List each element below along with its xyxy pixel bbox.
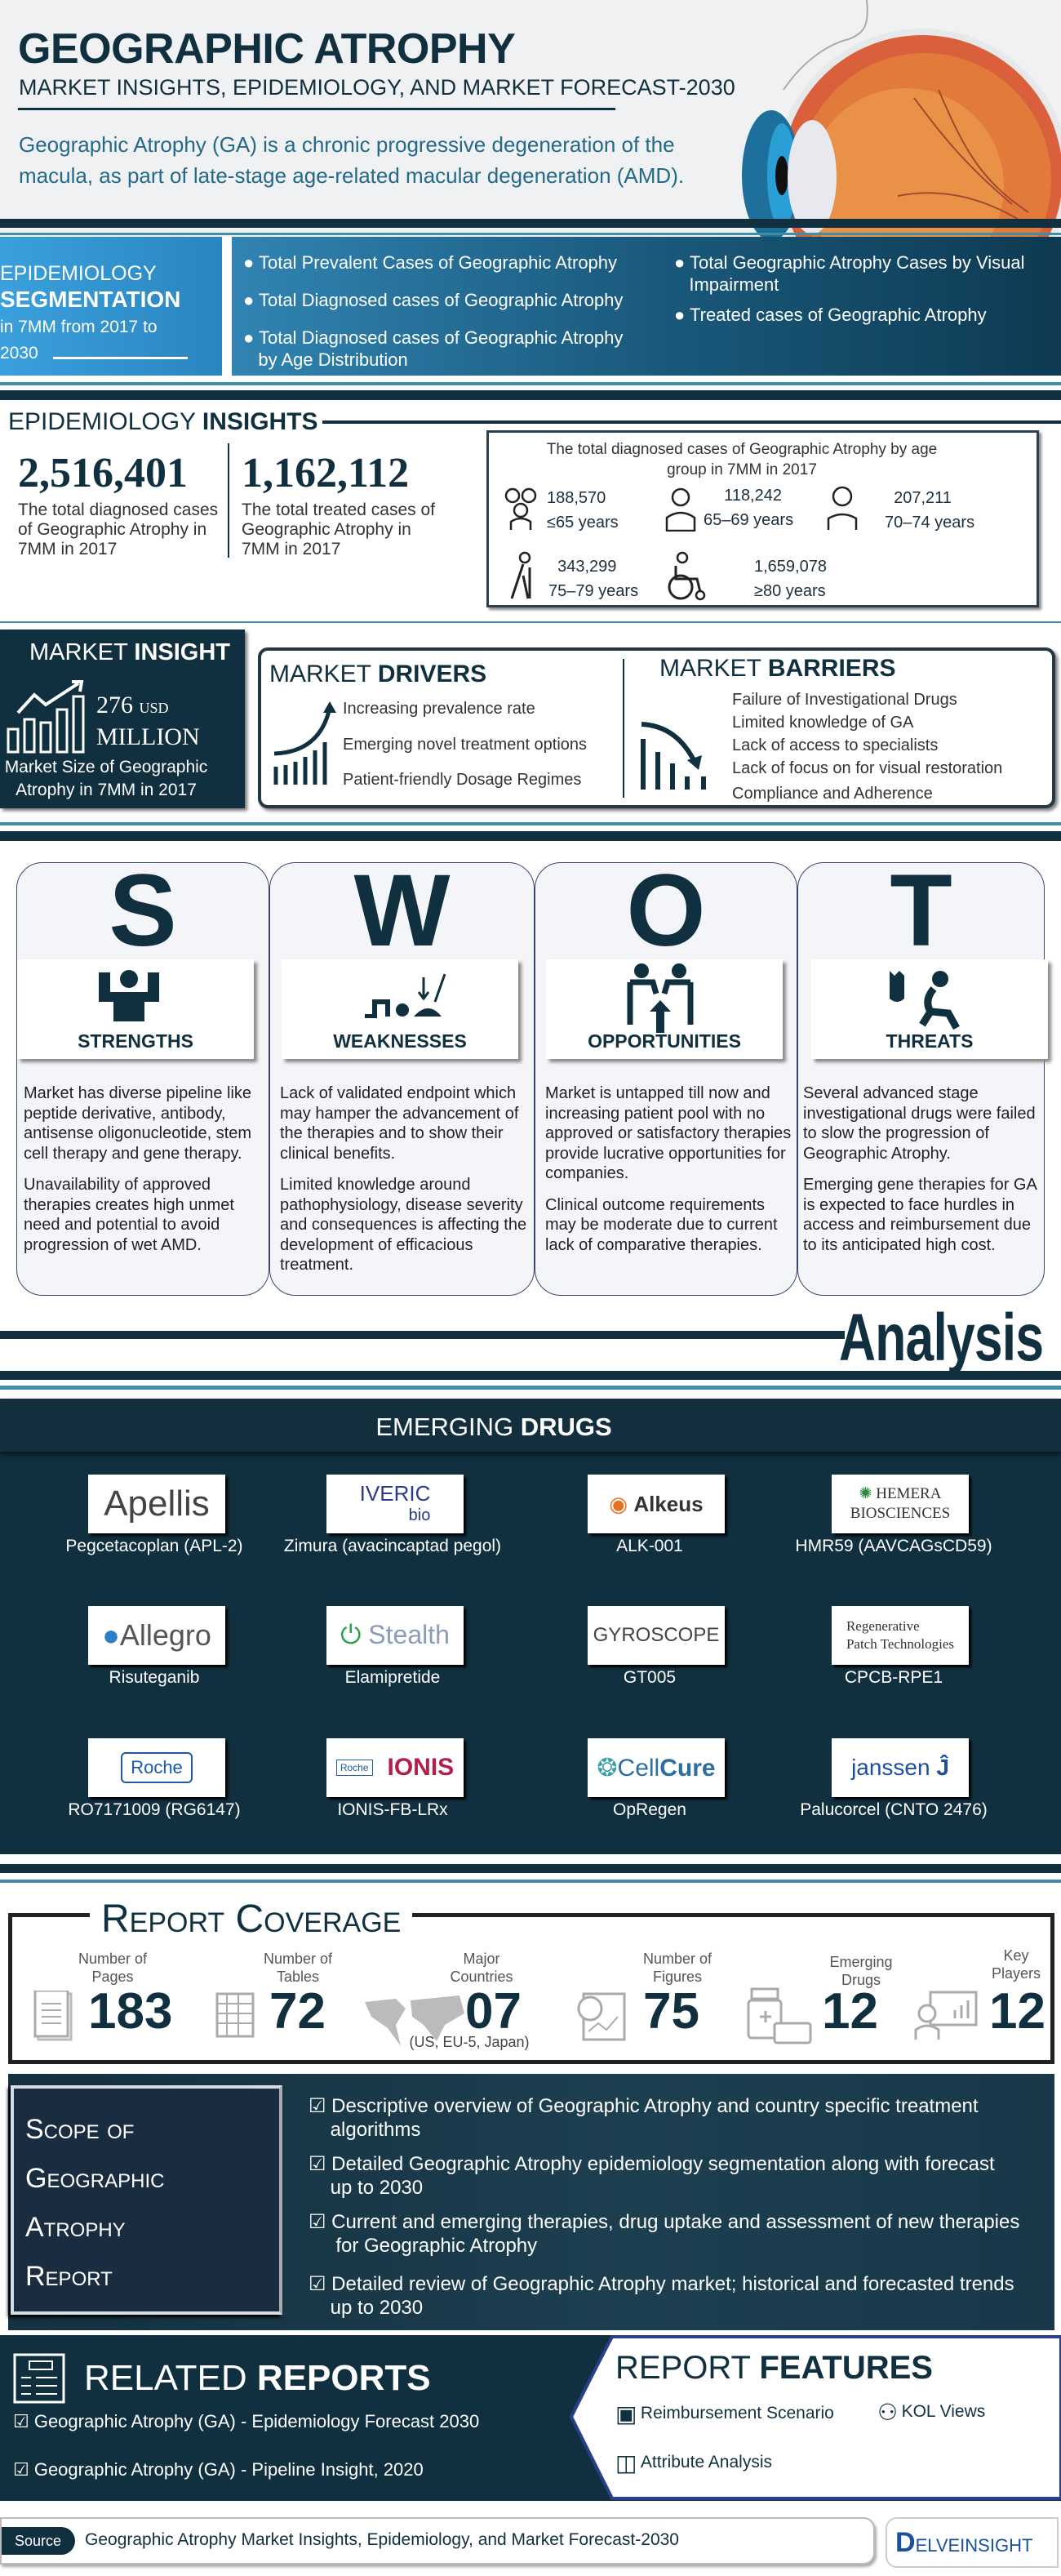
drivers list: Increasing prevalence rate [343,700,535,718]
drug: Apellis: Apellis [104,1484,210,1524]
item: tables [215,1951,333,2040]
panel: report features [570,2335,1061,2500]
scope bullets: up to 2030 [331,2297,423,2319]
scope bullets: for Geographic Atrophy [335,2235,537,2257]
panel: age groups: group in 7MM in 2017 [667,461,817,478]
panel: market insight: Atrophy in 7MM in 2017 [16,781,197,799]
age item ≥80 [668,552,827,601]
item: key players [914,1947,1045,2040]
segmentation heading: in 7MM from 2017 to [0,318,158,336]
panel: SWOT strengths [16,862,269,1296]
drivers list: Emerging novel treatment options [343,736,587,754]
age item 70-74: 70–74 years [885,514,974,532]
item: emerging drugs: Drugs [841,1972,881,1988]
panel: emerging drugs [0,1399,1061,1854]
drug: Regenerative Patch: Patch Technologies [846,1636,954,1652]
age item 65-69: 65–69 years [704,511,793,529]
item: emerging drugs: 12 [822,1983,878,2040]
panel: SWOT opportunities: O [626,854,706,968]
item: pages: Pages [91,1969,134,1985]
panel: drivers and barriers [258,647,1055,808]
panel: market insight: 276 USD [96,692,169,719]
text: RO7171009 (RG6147) [68,1800,241,1819]
item: key players: Players [992,1965,1041,1982]
age item ≤65 [504,488,619,532]
segmentation heading [0,262,180,363]
drug: Hemera [832,1475,969,1533]
drug: Allegro [88,1606,225,1665]
stat: diagnosed cases: The total diagnosed cases [18,501,218,519]
segmentation bullets: by Age Distribution [258,349,408,370]
scope bullets: ☑ Detailed Geographic Atrophy epidemiology segmentation along with forecast [309,2153,995,2175]
text: Pegcetacoplan (APL-2) [65,1537,243,1555]
panel: SWOT opportunities: Market is untapped till now and increasing patient pool with no approved or satisfactory therapies provide lucrative opportunities for companies. [545,1084,791,1182]
drivers heading: MARKET DRIVERS [269,661,486,687]
source bar: Source [15,2533,61,2549]
item: figures: Figures [653,1969,702,1985]
coverage heading: Report Coverage [101,1898,401,1941]
panel: SWOT threats [797,862,1045,1296]
text: Risuteganib [109,1668,199,1687]
text: IONIS-FB-LRx [337,1800,448,1819]
band lines [0,219,1061,228]
panel: SWOT opportunities: OPPORTUNITIES [588,1030,741,1052]
description: Geographic Atrophy (GA) is a chronic progressive degeneration of the macula, as part of late-stage age-related macular degeneration (AMD). [19,132,684,188]
age item 70-74 [828,487,974,532]
segmentation bullets [243,252,624,370]
panel: report coverage [8,1913,1054,2064]
scope bullets: ☑ Descriptive overview of Geographic Atrophy and country specific treatment [309,2095,979,2117]
item: key players: 12 [989,1983,1045,2040]
item: figures: 75 [643,1983,699,2040]
age item 70-74: 207,211 [894,489,952,507]
item: countries: Major [463,1951,499,1967]
icon: report document [13,2353,65,2404]
scope title box: Atrophy [25,2212,126,2243]
related heading: RELATED REPORTS [84,2358,431,2398]
panel: SWOT weaknesses: Limited knowledge around pathophysiology, disease severity and consequences is affecting the development of efficacious treatment. [280,1176,526,1274]
scope title box: Scope of [25,2114,134,2145]
item: figures [578,1951,712,2041]
scope bullets: ☑ Current and emerging therapies, drug uptake and assessment of new therapies [309,2211,1019,2233]
barriers list [732,691,1002,803]
drug: Apellis [88,1475,225,1533]
panel: market insight: Market Size of Geographic [5,758,207,776]
stat: diagnosed cases: 7MM in 2017 [18,540,117,558]
logo: DelveInsight: DELVEINSIGHT [895,2527,1032,2558]
barriers list: Lack of access to specialists [732,736,938,754]
drug: Ionis [326,1738,464,1797]
item: pages: Number of [78,1951,147,1967]
text: Zimura (avacincaptad pegol) [284,1537,501,1555]
panel: age groups: The total diagnosed cases of Geographic Atrophy by age [547,441,937,458]
age item ≥80: ≥80 years [754,582,826,600]
feature: reimbursement: ▣ Reimbursement Scenario [615,2401,834,2427]
related list: ☑ Geographic Atrophy (GA) - Epidemiology Forecast 2030 [13,2411,479,2431]
icon: bomb and person [890,971,960,1030]
item: key players: Key [1003,1947,1029,1964]
item: countries [365,1951,530,2050]
barriers list: Lack of focus on for visual restoration [732,759,1002,777]
text: HMR59 (AAVCAGsCD59) [795,1537,992,1555]
barriers list: Compliance and Adherence [732,785,933,803]
subtitle: MARKET INSIGHTS, EPIDEMIOLOGY, AND MARKET FORECAST-2030 [19,75,735,100]
age item ≥80: 1,659,078 [754,558,827,576]
panel: related reports: ☑ Geographic Atrophy (GA) - Pipeline Insight, 2020 [13,2459,424,2480]
panel: SWOT strengths: Market has diverse pipeline like peptide derivative, antibody, antisense oligonucleotide, stem cell therapy and gene therapy. [24,1084,251,1163]
panel: SWOT opportunities: Clinical outcome requirements may be moderate due to current lack of comparative therapies. [545,1195,778,1254]
drug: CellCure [588,1738,725,1797]
icon: falling chart [641,722,706,790]
drug: Stealth: ⏻ Stealth [340,1620,450,1649]
panel: SWOT opportunities [535,862,797,1296]
drug: Iveric: bio [409,1506,430,1524]
drug: CellCure: ❂CellCure [597,1754,716,1782]
scope bullets: algorithms [331,2119,420,2141]
drivers list [343,700,587,789]
drug: Allegro: ●Allegro [102,1618,211,1652]
panel: epidemiology segmentation: Impairment [689,274,779,295]
stat: diagnosed cases [18,450,218,558]
text: GT005 [624,1668,676,1687]
item: tables: Tables [277,1969,319,1985]
scope bullets: ☑ Detailed review of Geographic Atrophy market; historical and forecasted trends [309,2273,1014,2295]
stat: treated cases: The total treated cases of [242,501,435,519]
panel: age groups [486,430,1039,607]
item: tables: 72 [269,1983,326,2040]
text: OpRegen [613,1800,686,1819]
panel: market insight: MILLION [96,723,200,750]
icon: rising chart [274,701,336,785]
panel: SWOT threats: THREATS [886,1030,973,1052]
drug: Ionis: Roche [340,1762,369,1773]
title: GEOGRAPHIC ATROPHY [18,25,515,73]
drug: Janssen: janssen Ĵ [851,1755,949,1780]
item: countries: Countries [450,1969,513,1985]
panel: scope of report [8,2074,1054,2330]
stat: diagnosed cases: of Geographic Atrophy in [18,520,206,539]
eye illustration [742,0,1061,237]
barriers list: Limited knowledge of GA [732,714,913,732]
panel: SWOT weaknesses [269,862,535,1296]
emerging drugs heading: EMERGING DRUGS [375,1413,612,1441]
segmentation bullets: ● Total Diagnosed cases of Geographic Atrophy [243,327,623,348]
age item 75-79 [511,552,638,600]
feature: KOL views: ⚇ KOL Views [877,2400,985,2425]
panel: epidemiology segmentation: ● Treated cases of Geographic Atrophy [674,305,987,325]
age item ≤65: 188,570 [547,489,606,507]
panel: SWOT threats: T [890,854,952,968]
drug: Regenerative Patch: Regenerative [846,1618,920,1634]
panel: market insight [0,630,245,808]
header background [0,0,1061,237]
drug: Roche: Roche [131,1757,183,1777]
stat: treated cases: 1,162,112 [242,450,409,496]
segmentation heading: 2030 [0,344,38,363]
panel: SWOT weaknesses: WEAKNESSES [333,1030,467,1052]
feature: attribute analysis: ◫ Attribute Analysis [615,2450,772,2476]
heading: epidemiology insights: EPIDEMIOLOGY INSIGHTS [8,408,318,435]
segmentation bullets: ● Total Diagnosed cases of Geographic Atrophy [243,290,623,310]
icon: falling person [365,973,446,1018]
panel: SWOT threats: Several advanced stage investigational drugs were failed to slow the progression of Geographic Atrophy. [803,1084,1036,1163]
segmentation heading: EPIDEMIOLOGY [0,262,157,285]
drug: Gyroscope [588,1606,725,1665]
item: figures: Number of [643,1951,712,1967]
item: pages [34,1951,172,2041]
panel: epidemiology segmentation [0,237,1061,376]
panel: epidemiology segmentation: ● Total Geographic Atrophy Cases by Visual [674,252,1025,273]
stat: diagnosed cases: 2,516,401 [18,450,188,496]
scope bullets [309,2095,1019,2319]
segmentation bullets: ● Total Prevalent Cases of Geographic Atrophy [243,252,617,273]
scope title box: Geographic [25,2163,164,2194]
source bar: Geographic Atrophy Market Insights, Epidemiology, and Market Forecast-2030 [85,2530,679,2549]
drug: Stealth [326,1606,464,1665]
panel: market insight: MARKET INSIGHT [29,639,230,665]
stat: treated cases: Geographic Atrophy in [242,520,411,539]
drug: Regenerative Patch [832,1606,969,1665]
text: Elamipretide [345,1668,440,1687]
icon: strong man [99,970,159,1021]
heading: analysis [0,1331,845,1339]
barriers list: Failure of Investigational Drugs [732,691,957,709]
drug: Alkeus [588,1475,725,1533]
panel: SWOT weaknesses: Lack of validated endpoint which may hamper the advancement of the therapies and to show their clinical benefits. [280,1084,518,1163]
drug: Janssen [832,1738,969,1797]
item: emerging drugs [748,1954,893,2044]
stat: treated cases [242,450,435,558]
icon: two people with arrow [627,963,694,1033]
text: ALK-001 [616,1537,683,1555]
panel: related reports [0,2335,1061,2501]
text: Analysis [839,1301,1043,1375]
age item ≤65: ≤65 years [547,514,619,532]
text: CPCB-RPE1 [845,1668,943,1687]
panel: SWOT weaknesses: W [354,854,450,968]
panel: SWOT strengths: S [109,854,177,968]
drug: Alkeus: ◉ Alkeus [609,1491,704,1515]
drug: Hemera: ✺ HEMERA [859,1485,941,1502]
icon: growth bars [7,680,85,753]
stat: treated cases: 7MM in 2017 [242,540,340,558]
panel: SWOT strengths: STRENGTHS [78,1030,193,1052]
age item 65-69: 118,242 [724,487,782,505]
drug: Roche [88,1738,225,1797]
drug: Iveric: IVERIC [360,1481,430,1506]
item: tables: Number of [264,1951,332,1967]
item: countries: (US, EU-5, Japan) [409,2034,530,2050]
text: Palucorcel (CNTO 2476) [800,1800,988,1819]
segmentation heading: SEGMENTATION [0,287,180,312]
drug: Iveric [326,1475,464,1533]
source bar [0,2517,875,2565]
scope bullets: up to 2030 [331,2177,423,2199]
age item 75-79: 343,299 [557,558,616,576]
barriers heading: MARKET BARRIERS [659,655,896,682]
panel: SWOT strengths: Unavailability of approved therapies creates high unmet need and potential to avoid progression of wet AMD. [24,1176,234,1254]
scope title box: Report [25,2261,113,2292]
drug: Gyroscope: GYROSCOPE [593,1624,719,1646]
item: pages: 183 [88,1983,172,2040]
age item 65-69 [666,487,793,532]
item: emerging drugs: Emerging [829,1954,893,1970]
drivers list: Patient-friendly Dosage Regimes [343,771,581,789]
age item 75-79: 75–79 years [548,582,638,600]
panel: SWOT threats: Emerging gene therapies for GA is expected to face hurdles in access and reimbursement due to its anticipated high cost. [803,1176,1037,1254]
item: countries: 07 [465,1983,522,2040]
scope title box [11,2085,282,2315]
logo: DelveInsight [886,2517,1059,2568]
drug: Hemera: BIOSCIENCES [850,1505,950,1522]
features heading: REPORT FEATURES [615,2350,933,2386]
drug: Ionis: IONIS [387,1754,454,1781]
